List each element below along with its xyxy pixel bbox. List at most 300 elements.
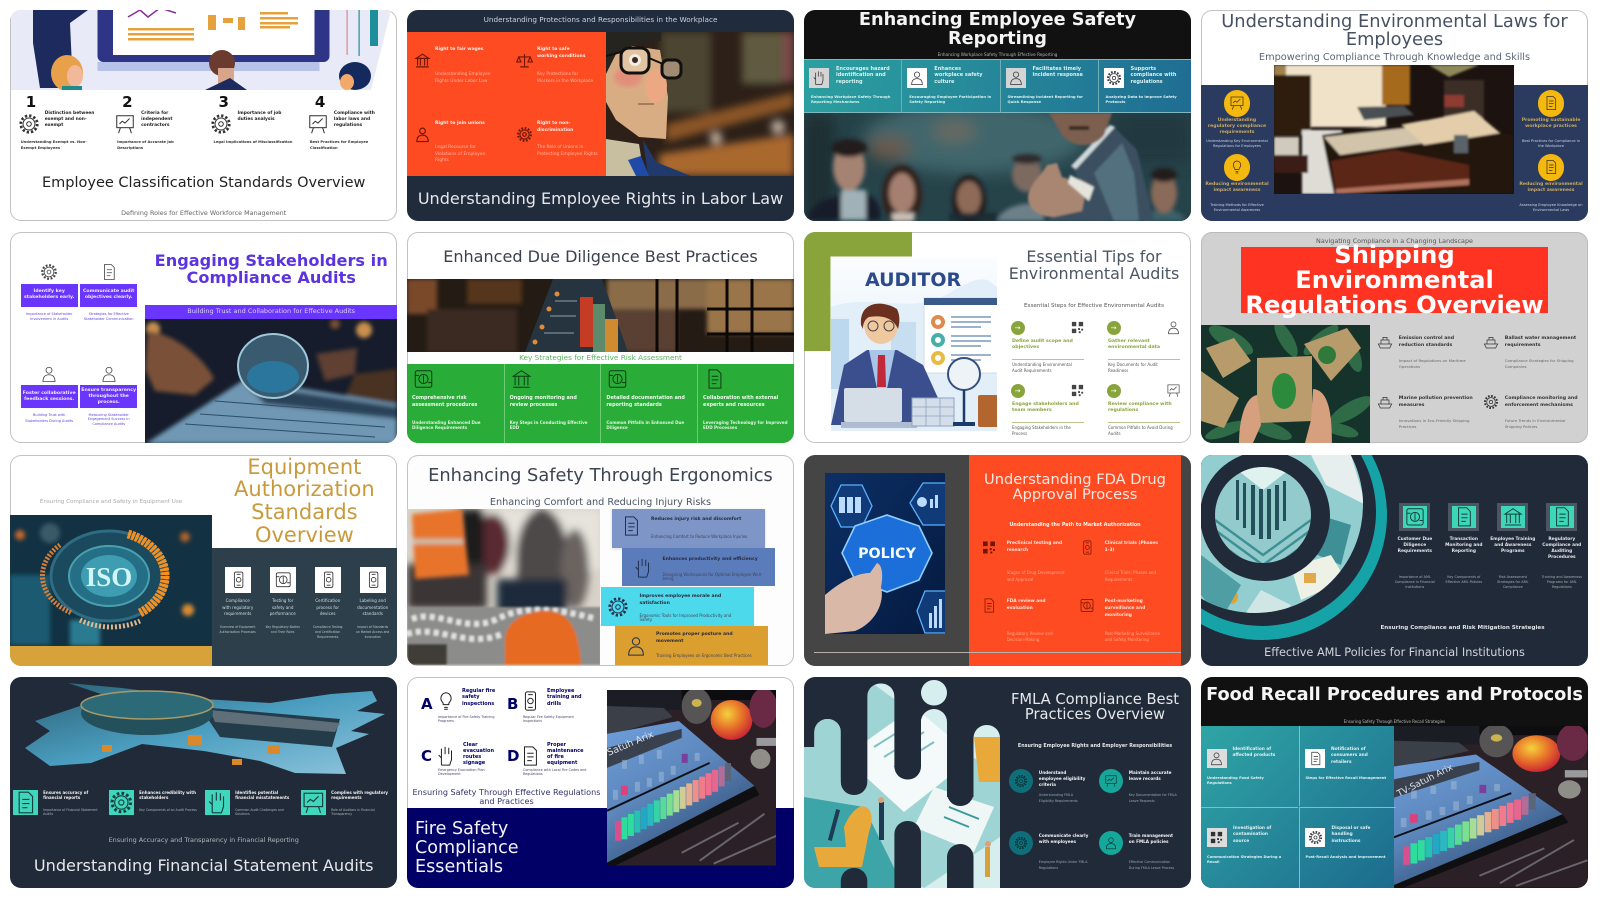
icon	[1166, 383, 1181, 398]
description: Key Documents for Audit	[1108, 362, 1158, 367]
photo: ISO gear: ISO	[86, 562, 132, 592]
title	[1201, 12, 1588, 50]
description: Protocols	[1106, 100, 1125, 104]
description: Designing Workspaces for Optimal Employee Well-	[662, 572, 762, 577]
description	[80, 312, 137, 323]
panel: AML Policies	[1201, 455, 1588, 666]
heading: Distinction between	[45, 111, 94, 116]
heading: Proper	[547, 742, 566, 748]
icon	[1070, 383, 1085, 398]
heading	[547, 688, 582, 708]
description: Key Components of	[1447, 575, 1480, 579]
panel: Food Recall Procedures	[1201, 677, 1588, 888]
heading: Testing for	[272, 598, 293, 603]
description: Violations of Employee	[435, 152, 485, 157]
subtitle: Understanding the Path to Market Authorization	[1009, 523, 1141, 528]
heading	[1039, 770, 1085, 788]
description: Leveraging Technology for Improved	[703, 420, 788, 425]
red content panel	[407, 32, 606, 176]
description	[662, 573, 762, 582]
description: Recall	[1207, 860, 1220, 864]
illustration: auditor at laptop	[830, 257, 997, 431]
item: unions	[416, 120, 485, 163]
description: Importance of AML	[1399, 575, 1431, 579]
description: Safety	[640, 617, 652, 622]
description: Common Pitfalls to Avoid During	[1108, 425, 1173, 430]
heading: Foster collaborative	[23, 391, 76, 396]
heading: Marine pollution prevention	[1399, 396, 1473, 401]
description: Regulations	[1039, 866, 1058, 870]
description: Understanding Exempt vs. Non-	[21, 140, 87, 144]
illustration: capsule-cut paperwork scene	[804, 680, 1000, 888]
heading: Improves employee morale and	[640, 594, 721, 599]
description	[523, 716, 574, 724]
heading	[1505, 395, 1578, 409]
heading	[640, 593, 721, 607]
heading: Requirements	[1398, 549, 1432, 554]
icon	[1224, 90, 1250, 117]
icon	[625, 635, 647, 657]
heading	[1399, 395, 1473, 409]
heading	[1331, 747, 1368, 767]
heading: Procedures	[1548, 555, 1576, 560]
icon	[412, 368, 435, 390]
heading: identification and	[836, 72, 886, 78]
description: Strategies for AML	[1497, 580, 1528, 584]
subtitle: Key Strategies for Effective Risk Assessment	[519, 353, 682, 362]
panel: Engaging Stakeholders	[10, 232, 397, 443]
step marker: →	[1015, 324, 1020, 332]
icon	[40, 365, 58, 383]
step marker: →	[1015, 387, 1020, 395]
item 2	[116, 93, 174, 150]
description: EDD	[510, 425, 519, 430]
icon	[1006, 68, 1026, 88]
subtitle: Understanding Protections and Responsibilities in the Workplace	[484, 14, 717, 24]
heading: with employees	[1039, 839, 1076, 844]
item: requirements	[301, 787, 395, 822]
description	[1201, 138, 1273, 149]
icon	[1104, 68, 1124, 88]
icon	[301, 790, 326, 815]
heading	[1105, 541, 1158, 555]
description: Safety Reporting	[909, 100, 945, 104]
icon	[315, 567, 341, 593]
heading: Identify key	[33, 289, 65, 294]
description: Engaging Stakeholders in the	[1012, 425, 1071, 430]
item: preclinical	[976, 535, 1071, 595]
heading	[606, 395, 685, 409]
icon badge	[1099, 831, 1123, 855]
heading	[139, 790, 196, 801]
item: culture	[901, 59, 999, 113]
description	[1106, 95, 1177, 105]
heading: Employee Training	[1490, 537, 1535, 542]
dark panel	[212, 548, 397, 666]
heading	[235, 790, 289, 801]
heading: Supports	[1130, 66, 1156, 72]
panel: Financial Statement Audits	[10, 677, 397, 888]
heading: maintenance	[547, 748, 584, 754]
description: Reporting Mechanisms	[811, 100, 859, 104]
rule	[1108, 358, 1180, 361]
letter: A	[421, 695, 433, 713]
heading: with regulatory	[222, 605, 253, 610]
heading: Ensures accuracy of	[43, 790, 88, 795]
description	[43, 808, 97, 817]
item: regulatory compliance	[1201, 90, 1273, 154]
icon	[632, 557, 654, 579]
description: Streamlining Incident Reporting for	[1008, 95, 1083, 99]
heading: Communicate audit	[83, 289, 134, 294]
description: Development	[438, 772, 461, 776]
gold strip	[10, 646, 212, 666]
heading: exempt and non-	[45, 117, 87, 122]
heading: Engage stakeholders and	[1012, 402, 1079, 407]
heading: working conditions	[537, 54, 585, 59]
item: transaction monitoring	[1439, 500, 1488, 595]
item: leave records	[1098, 765, 1188, 820]
heading	[537, 46, 586, 59]
item: accuracy	[13, 787, 107, 822]
item B	[506, 687, 592, 727]
heading: Understanding	[1218, 118, 1256, 122]
heading: measures	[1399, 403, 1424, 408]
letter: B	[507, 695, 518, 713]
heading: Identification of	[1232, 747, 1271, 752]
description: Diligence Requirements	[412, 425, 467, 430]
description: Diligence	[606, 425, 628, 430]
item: disposal	[1298, 807, 1396, 889]
description	[1105, 631, 1160, 644]
description: Key Steps in Conducting Effective	[510, 420, 588, 425]
description: Understanding Food Safety	[1207, 776, 1264, 780]
letter: D	[507, 747, 519, 765]
icon	[270, 567, 296, 593]
item: post-marketing	[1074, 593, 1169, 653]
heading	[1537, 537, 1586, 561]
description	[537, 144, 598, 157]
heading: Programs	[1501, 549, 1525, 554]
heading	[1439, 537, 1488, 555]
description	[1039, 859, 1088, 871]
heading: devices	[320, 611, 335, 616]
heading: discrimination	[537, 128, 573, 133]
description: and Their Roles	[271, 630, 294, 634]
number: 3	[218, 93, 229, 111]
description: Strategies for Effective	[89, 312, 129, 316]
subtitle: Enhancing Comfort and Reducing Injury Risks	[490, 497, 711, 508]
heading: Right to join unions	[435, 121, 485, 126]
description: Post-Recall Analysis and Improvement	[1306, 855, 1386, 859]
icon	[517, 127, 532, 142]
heading: regulations	[334, 123, 362, 128]
description: Inspections	[523, 719, 542, 723]
title: Enhancing Safety Through Ergonomics	[428, 464, 773, 486]
item: employee training	[1488, 500, 1537, 595]
heading	[463, 742, 494, 766]
description: Stakeholders During Audits	[25, 419, 73, 423]
heading: contamination	[1233, 832, 1268, 837]
description	[435, 144, 485, 163]
heading: requirements	[1220, 130, 1254, 135]
heading	[80, 385, 137, 408]
heading: Right to fair wages	[435, 47, 483, 52]
heading	[334, 110, 375, 128]
heading: evacuation	[463, 748, 494, 754]
icon	[519, 745, 541, 767]
heading: Right to non-	[537, 121, 570, 126]
description: Programs	[438, 719, 454, 723]
item: misstatements	[205, 787, 299, 822]
item: compliance	[215, 548, 260, 666]
heading	[1390, 537, 1439, 555]
heading: requirements	[331, 795, 362, 800]
description: Leave Requests	[1129, 799, 1155, 803]
icon	[1079, 597, 1095, 614]
description	[305, 625, 350, 640]
description: Enhancing Workplace Safety Through	[811, 95, 890, 99]
step: productivity	[622, 548, 775, 586]
heading	[1515, 182, 1587, 194]
description	[640, 614, 731, 622]
panel: Fire Safety Compliance	[407, 677, 794, 888]
icon	[435, 690, 457, 712]
heading	[1515, 118, 1587, 130]
heading: reporting	[836, 79, 863, 85]
icon	[100, 263, 118, 281]
description: Compliance Strategies for Shipping	[1505, 358, 1574, 363]
heading: and Awareness	[1494, 543, 1531, 548]
title	[1000, 692, 1190, 722]
description: Environmental Awareness	[1214, 208, 1260, 212]
description	[1108, 425, 1173, 437]
icon	[1305, 828, 1325, 847]
heading	[1108, 402, 1172, 415]
heading: Compliance and	[1542, 543, 1581, 548]
heading: workplace practices	[1525, 124, 1577, 129]
heading: objectives	[1012, 345, 1039, 350]
olive accent block	[804, 232, 912, 351]
heading: objectives clearly.	[85, 295, 133, 300]
heading: duties analysis	[237, 117, 275, 122]
description: Importance of Stakeholder	[26, 312, 72, 316]
description: Analyzing Data to Improve Safety	[1106, 95, 1177, 99]
description: Importance of Fire Safety Training	[438, 715, 494, 719]
title: Approval Process	[1013, 486, 1137, 503]
rule	[1012, 421, 1084, 424]
heading: Enhances	[934, 66, 961, 72]
heading: regulatory compliance	[1208, 124, 1266, 129]
step marker	[1106, 321, 1120, 335]
subtitle: Ensuring Compliance and Risk Mitigation Strategies	[1380, 625, 1545, 631]
description	[412, 420, 481, 431]
item: review compliance	[1104, 380, 1194, 443]
description	[1515, 202, 1587, 213]
heading: monitoring	[1105, 613, 1132, 618]
icon	[205, 790, 230, 815]
subtitle: Ensuring Employee Rights and Employer Responsibilities	[1018, 744, 1172, 749]
heading: on FMLA policies	[1129, 839, 1169, 844]
heading: source	[1233, 839, 1249, 844]
heading: Promoting sustainable	[1522, 118, 1580, 123]
icon	[414, 54, 431, 68]
description: Exempt Employees	[21, 146, 60, 150]
heading: team members	[1012, 408, 1052, 413]
heading	[1233, 826, 1271, 846]
heading: handling	[1332, 832, 1353, 837]
photo: kraft packages and leaves	[1201, 325, 1370, 443]
panel: Employee Classification Standards	[10, 10, 397, 221]
heading: financial misstatements	[235, 795, 289, 800]
heading: compliance with	[1130, 72, 1176, 78]
photo: cartoon lawyer	[606, 32, 794, 176]
description: Protecting Employee Rights	[537, 152, 598, 157]
description: Role of Auditors in Financial	[331, 808, 375, 812]
description: Requirements	[1105, 576, 1132, 582]
title: Effective AML Policies for Financial Institutions	[1264, 646, 1525, 659]
description	[235, 808, 284, 817]
step marker	[1010, 321, 1024, 335]
letter: C	[421, 747, 432, 765]
heading	[1012, 339, 1073, 352]
photo: office desk with papers	[1274, 64, 1514, 194]
subtitle: Empowering Compliance Through Knowledge and Skills	[1259, 52, 1530, 63]
heading: Compliance monitoring and	[1505, 396, 1578, 401]
title	[212, 456, 397, 546]
description	[1399, 358, 1466, 370]
heading: Right to safe	[537, 47, 570, 52]
heading	[1108, 339, 1160, 352]
description: Compliance	[1503, 585, 1523, 589]
item: documentation	[600, 364, 698, 443]
heading: Notification of	[1331, 747, 1366, 752]
item: transparency	[80, 365, 137, 429]
description	[1439, 575, 1488, 585]
description	[260, 625, 305, 635]
description: Key Documentation for FMLA	[1129, 793, 1177, 797]
item: credibility	[109, 787, 203, 822]
description	[215, 625, 260, 635]
heading: Certification	[315, 598, 340, 603]
heading	[656, 631, 733, 645]
heading: Employee	[547, 688, 574, 694]
item: training	[1098, 827, 1188, 882]
panel: FMLA Compliance	[804, 677, 1191, 888]
description	[1390, 575, 1439, 591]
heading	[934, 66, 982, 85]
heading: requirements	[224, 611, 251, 616]
heading: FDA review and	[1007, 599, 1045, 604]
subtitle	[407, 788, 606, 806]
title	[145, 252, 397, 286]
item: external experts	[697, 364, 795, 443]
icon: board	[116, 115, 134, 134]
description: Understanding Key Environmental	[1206, 138, 1268, 142]
item: gather data	[1104, 317, 1194, 380]
icon	[1376, 394, 1394, 410]
item: marine pollution	[1376, 392, 1480, 442]
heading	[1488, 537, 1537, 555]
subtitle: Ensuring Compliance and Safety in Equipment Use	[40, 499, 182, 505]
heading: Compliance	[226, 598, 250, 603]
heading: Regular fire	[462, 688, 495, 694]
heading	[21, 385, 78, 408]
description: Readiness	[1108, 368, 1128, 373]
description: Eligibility Requirements	[1039, 799, 1078, 803]
description	[1007, 570, 1065, 583]
photo: policy hexagon and hand	[825, 473, 945, 634]
description: the Workplace	[1538, 144, 1564, 148]
heading: Ongoing monitoring and	[510, 395, 577, 401]
heading	[836, 66, 890, 85]
title: Enhanced Due Diligence Best Practices	[443, 247, 758, 266]
description: Importance of Accurate Job	[117, 140, 174, 144]
description	[703, 420, 788, 431]
description: Measuring Stakeholder	[89, 413, 129, 417]
heading: Enhances productivity and efficiency	[662, 557, 758, 562]
subtitle: Enhancing Workplace Safety Through Effective Reporting	[938, 52, 1057, 57]
description: Environmental Laws	[1533, 208, 1569, 212]
photo caption on tablet: TV-Satuh Arix	[1396, 762, 1455, 799]
title: Employees	[1346, 29, 1443, 50]
heading: Labeling and	[359, 598, 386, 603]
icon	[907, 68, 927, 88]
heading: Emission control and	[1399, 336, 1454, 341]
description	[909, 95, 991, 104]
heading: documentation	[357, 605, 388, 610]
heading	[237, 110, 282, 122]
icon	[1538, 90, 1564, 117]
item: FDA review	[976, 593, 1071, 653]
panel: Enhanced Due Diligence	[407, 232, 794, 443]
heading	[1105, 599, 1145, 619]
description	[537, 72, 593, 84]
photo: tablet with charts	[1394, 726, 1588, 888]
description: Institutions	[1405, 585, 1424, 589]
description: Communication Strategies During a	[1207, 855, 1281, 859]
heading	[412, 395, 477, 409]
heading: signage	[463, 760, 485, 766]
item: communication	[1008, 827, 1098, 882]
icon	[606, 596, 628, 618]
icon	[1482, 334, 1500, 350]
description: Common Pitfalls in Enhanced Due	[606, 420, 684, 425]
panel: Equipment Authorization	[10, 455, 397, 666]
description: Legal Recourse for	[435, 145, 476, 150]
heading	[1007, 541, 1062, 555]
heading: standards	[363, 611, 383, 616]
heading: Auditing	[1551, 549, 1572, 554]
icon	[981, 597, 997, 614]
description	[1007, 631, 1053, 644]
heading: Facilitates timely	[1032, 66, 1081, 72]
title: Overview	[255, 523, 354, 547]
subtitle: Navigating Compliance in a Changing Landscape	[1316, 237, 1473, 245]
description: Compliance Audits	[92, 422, 125, 426]
heading: Promotes proper posture and	[656, 632, 733, 637]
heading: incident response	[1032, 72, 1083, 78]
red content panel	[969, 455, 1181, 666]
title: Environmental	[1295, 266, 1494, 294]
subtitle: and Practices	[479, 796, 534, 806]
description: Regulations for Employees	[1213, 144, 1261, 148]
description	[1207, 776, 1264, 786]
description: Regular Fire Safety Equipment	[523, 715, 574, 719]
icon	[519, 690, 541, 712]
subtitle band	[145, 305, 397, 319]
description: Training and Awareness	[1542, 575, 1582, 579]
